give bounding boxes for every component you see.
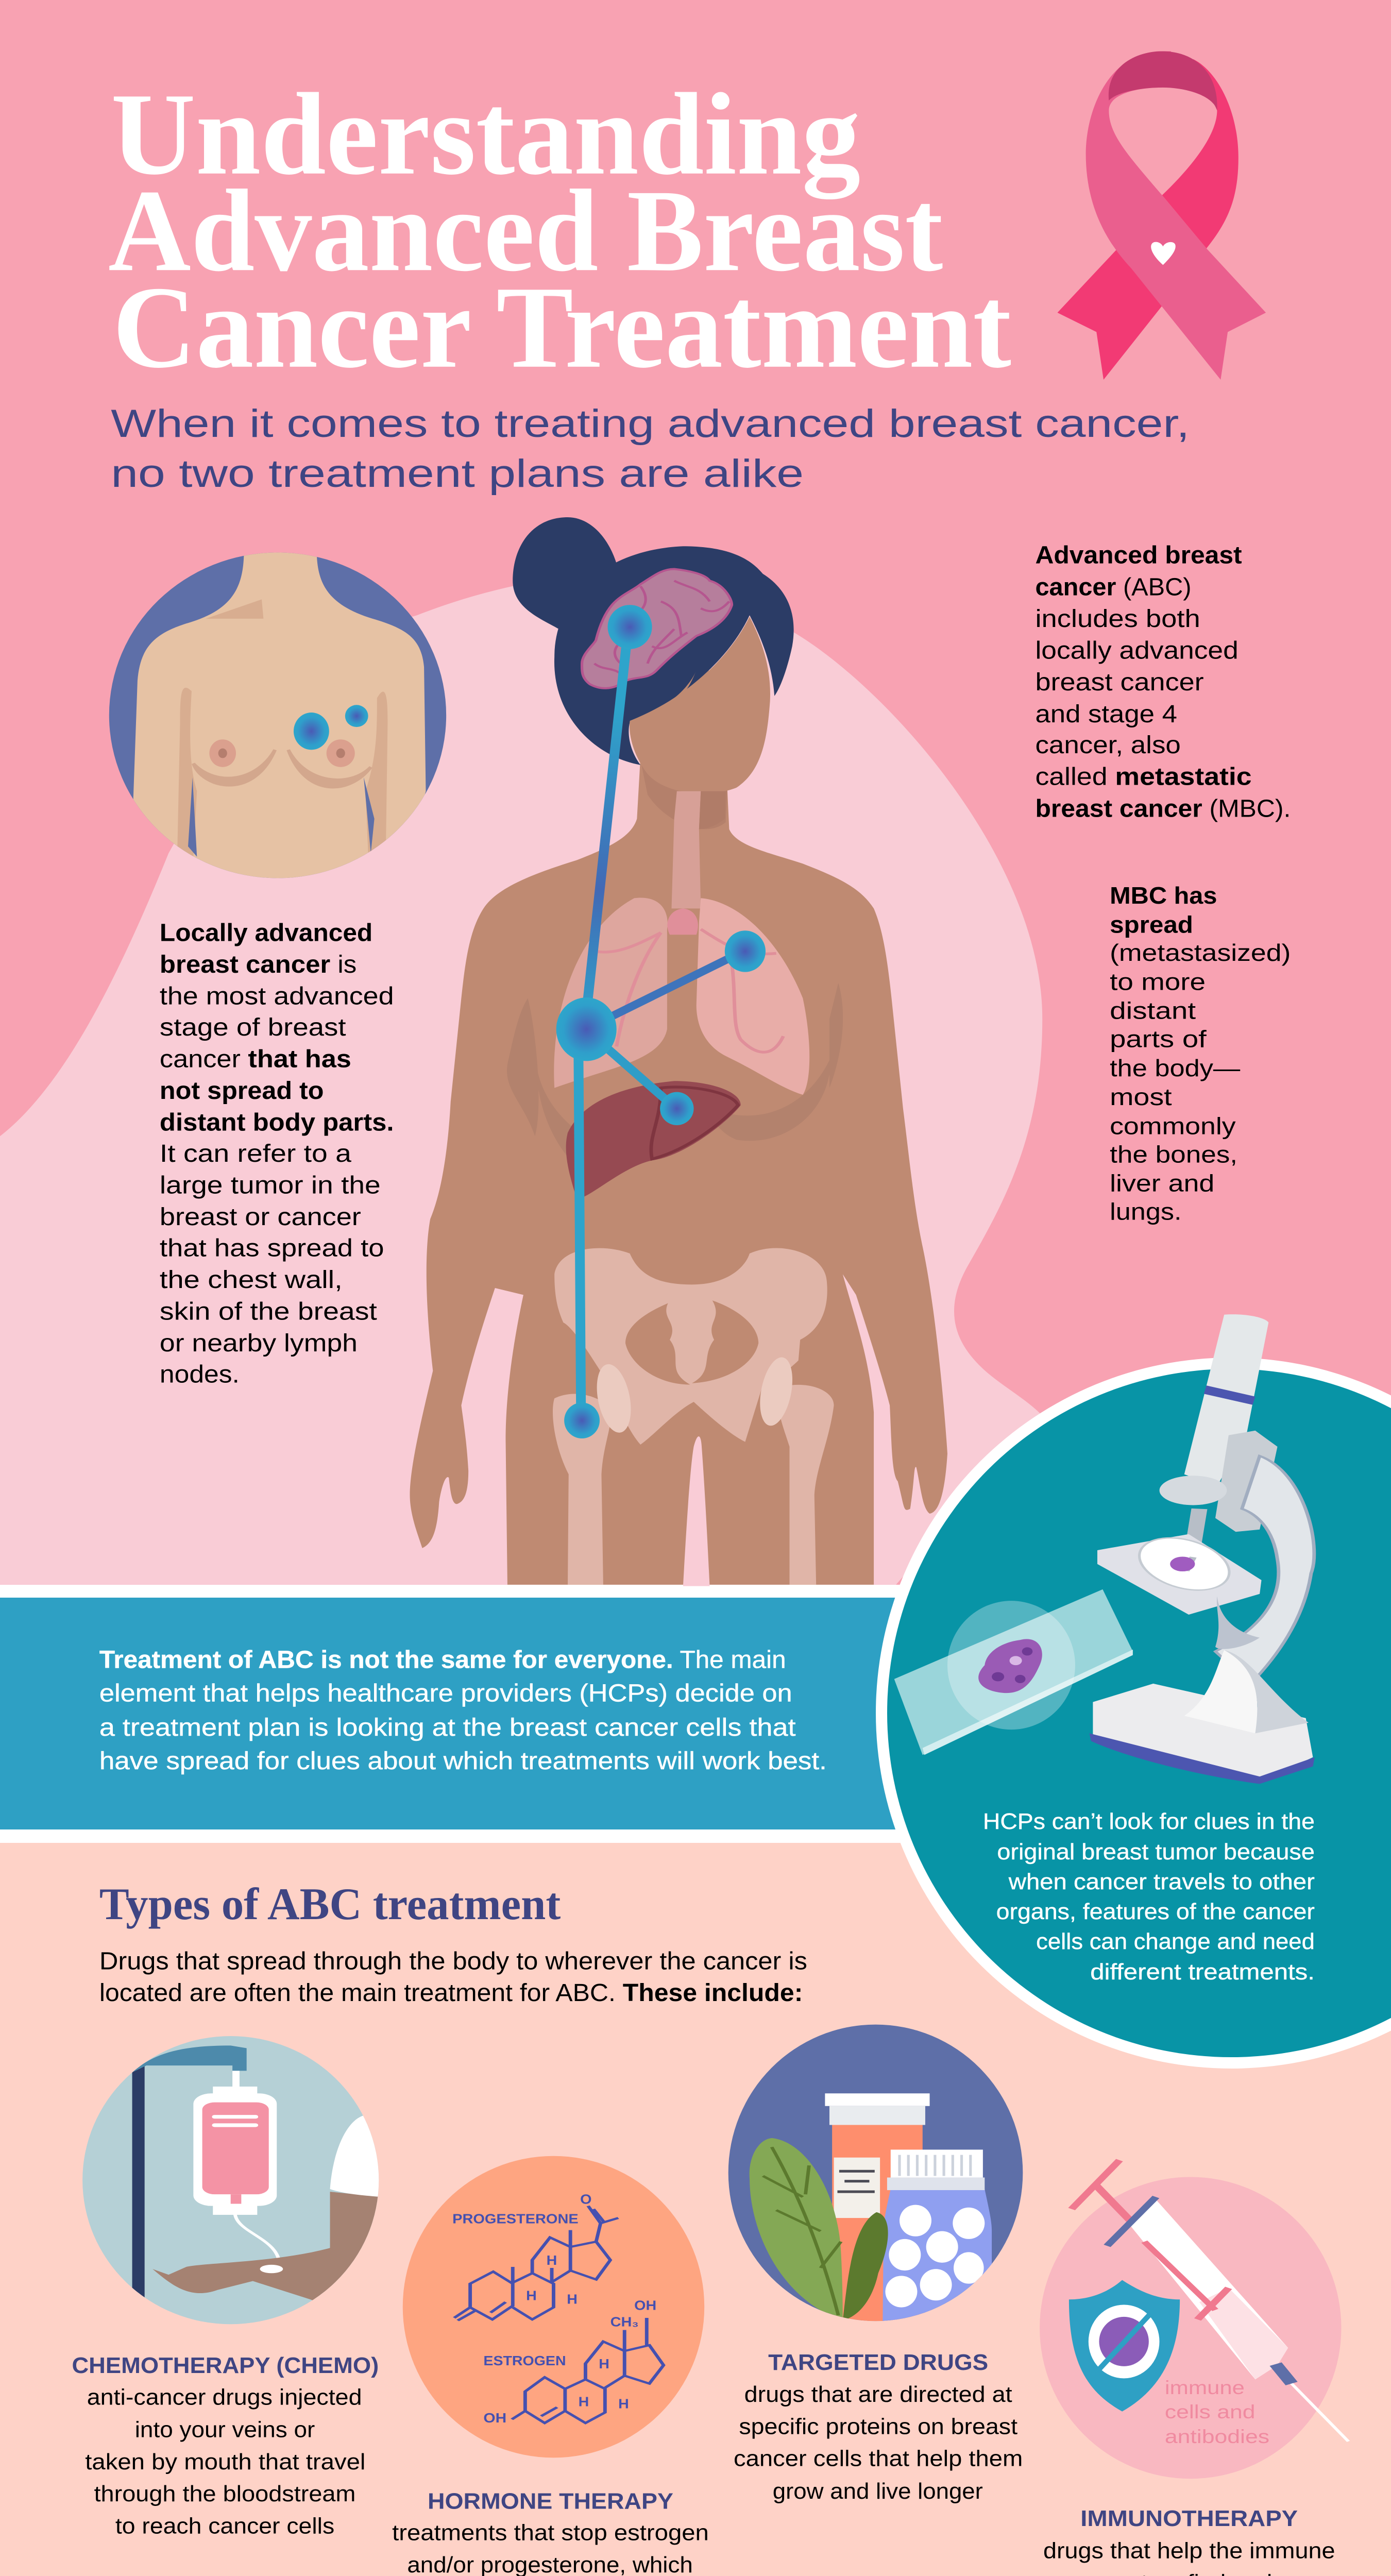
label: immune cells and antibodies: cells and xyxy=(1165,2401,1255,2422)
text: targeted drugs description xyxy=(734,2382,1023,2503)
text: locally advanced breast cancer: Locally advanced xyxy=(160,919,372,946)
icon: molecules: H xyxy=(618,2397,629,2411)
icon: molecules: ESTROGEN xyxy=(483,2353,566,2368)
icon: molecules: H xyxy=(526,2289,537,2303)
text: MBC has spread: (metastasized) xyxy=(1110,940,1291,967)
text: advanced breast cancer definition: cancer (ABC) xyxy=(1035,573,1192,601)
icon: molecules: H xyxy=(547,2253,557,2268)
leg gap xyxy=(683,1436,710,1586)
text: HCP clues xyxy=(983,1809,1315,1985)
body xyxy=(410,619,947,1585)
metastasis lines and tumors xyxy=(556,605,766,1438)
text: treatment of ABC: Treatment of ABC is not the same for everyone. The main xyxy=(99,1646,786,1673)
text: MBC has spread: liver and xyxy=(1110,1171,1214,1197)
background blob xyxy=(0,574,1042,1585)
title xyxy=(108,69,1012,392)
hair bun xyxy=(513,517,621,629)
card: immunotherapy xyxy=(1040,2160,1348,2576)
section: white gap xyxy=(0,1585,1391,1598)
text: MBC has spread: the body— xyxy=(1110,1055,1241,1081)
text: locally advanced breast cancer: the chest wall, xyxy=(160,1266,343,1293)
text: MBC has spread: most xyxy=(1110,1084,1172,1111)
heading: chemotherapy: CHEMOTHERAPY (CHEMO) xyxy=(72,2352,379,2378)
text: locally advanced breast cancer: breast or cancer xyxy=(160,1203,361,1231)
text: locally advanced breast cancer: skin of the breast xyxy=(160,1297,377,1325)
text: chemotherapy description: through the bloodstream xyxy=(94,2481,355,2506)
section: peach treatment types background xyxy=(0,1843,1391,2576)
label: immune cells and antibodies: antibodies xyxy=(1165,2426,1269,2447)
neck shadow xyxy=(640,760,727,829)
text: treatment of ABC: have spread for clues about which treatments will work best. xyxy=(99,1747,827,1774)
face xyxy=(630,617,770,793)
icon: IV drip xyxy=(82,2036,381,2328)
icon: molecules: H xyxy=(579,2395,589,2409)
text: locally advanced breast cancer: or nearby lymph xyxy=(160,1329,358,1357)
card: targeted drugs xyxy=(728,2025,1023,2503)
text: treatment of ABC xyxy=(99,1646,827,1774)
text: MBC has spread: commonly xyxy=(1110,1113,1236,1140)
card: hormone therapy xyxy=(375,2156,726,2576)
bronchi xyxy=(667,908,698,935)
text: advanced breast cancer definition: includes both xyxy=(1035,605,1200,632)
text: locally advanced breast cancer: stage of breast xyxy=(160,1013,346,1041)
text: chemotherapy description: to reach cancer cells xyxy=(115,2513,334,2538)
icon: microscope xyxy=(894,1314,1315,1784)
icon: molecules: H xyxy=(599,2357,609,2371)
text: chemotherapy description: into your veins or xyxy=(135,2417,315,2442)
panel: teal microscope circle xyxy=(876,1358,1391,2069)
text: MBC has spread: spread xyxy=(1110,911,1193,938)
icon: molecules: PROGESTERONE xyxy=(452,2212,579,2226)
text: advanced breast cancer definition: breast cancer xyxy=(1035,668,1204,696)
text: advanced breast cancer definition: cancer, also xyxy=(1035,731,1181,758)
title block xyxy=(108,51,1266,496)
subtitle xyxy=(111,401,1190,496)
text: MBC has spread xyxy=(1110,883,1291,1225)
text: targeted drugs description: cancer cells that help them xyxy=(734,2446,1023,2471)
text: locally advanced breast cancer: breast cancer is xyxy=(160,951,357,978)
subtitle: no two treatment plans are alike xyxy=(111,451,804,496)
icon: pill bottles and leaves xyxy=(728,2025,1023,2326)
text: types intro: Drugs that spread through the body to wherever the cancer is xyxy=(99,1947,807,1975)
treatment types xyxy=(72,2025,1348,2576)
text: chemotherapy description xyxy=(85,2384,365,2538)
section: blue treatment band xyxy=(0,1598,1391,1829)
glass slide xyxy=(894,1589,1133,1755)
text: MBC has spread: to more xyxy=(1110,969,1206,995)
text: locally advanced breast cancer: not spread to xyxy=(160,1077,324,1104)
text: locally advanced breast cancer: It can refer to a xyxy=(160,1140,351,1167)
text: MBC has spread: distant xyxy=(1110,998,1196,1024)
icon: molecules: O xyxy=(580,2192,592,2207)
text: locally advanced breast cancer: large tumor in the xyxy=(160,1171,381,1199)
text: advanced breast cancer definition xyxy=(1035,541,1291,822)
text: locally advanced breast cancer: cancer that has xyxy=(160,1045,351,1073)
heading: hormone therapy: HORMONE THERAPY xyxy=(428,2488,673,2514)
text: types intro: located are often the main treatment for ABC. These include: xyxy=(99,1978,803,2006)
brain xyxy=(582,569,732,688)
text: locally advanced breast cancer: that has spread to xyxy=(160,1234,384,1262)
text: targeted drugs description: specific proteins on breast xyxy=(739,2414,1017,2439)
icon: molecules xyxy=(403,2156,704,2458)
heading: targeted drugs: TARGETED DRUGS xyxy=(768,2349,988,2375)
label: immune cells and antibodies xyxy=(1165,2377,1269,2447)
trachea xyxy=(671,791,701,908)
icon: pink ribbon xyxy=(1058,51,1266,380)
hair strand xyxy=(667,670,697,707)
icon: molecules: OH xyxy=(634,2298,656,2313)
text: hormone therapy description xyxy=(375,2520,726,2576)
text: locally advanced breast cancer: the most advanced xyxy=(160,982,394,1010)
card: chemotherapy xyxy=(72,2036,381,2538)
text: MBC has spread: parts of xyxy=(1110,1026,1207,1053)
text: advanced breast cancer definition: called metastatic xyxy=(1035,762,1252,790)
femurs xyxy=(553,1394,610,1585)
text: MBC has spread: lungs. xyxy=(1110,1199,1182,1225)
text: advanced breast cancer definition: and stage 4 xyxy=(1035,700,1177,727)
heading: types of ABC treatment: Types of ABC treatment xyxy=(99,1879,561,1929)
text: targeted drugs description: grow and live longer xyxy=(773,2478,983,2503)
text: treatment of ABC: element that helps healthcare providers (HCPs) decide on xyxy=(99,1679,792,1707)
background: top pink section xyxy=(0,0,1391,1585)
text: hormone therapy description: treatments that stop estrogen xyxy=(392,2520,709,2545)
liver xyxy=(566,1081,741,1198)
icon: molecules: CH₃ xyxy=(610,2315,639,2329)
blue band and microscope xyxy=(99,1314,1315,2006)
label: immune cells and antibodies: immune xyxy=(1165,2377,1245,2398)
lungs xyxy=(554,897,668,1088)
text: advanced breast cancer definition: locally advanced xyxy=(1035,636,1239,664)
text: MBC has spread: the bones, xyxy=(1110,1141,1237,1168)
text: locally advanced breast cancer: distant body parts. xyxy=(160,1108,394,1136)
pelvis xyxy=(554,1248,827,1445)
icon: molecules: OH xyxy=(483,2411,506,2426)
text: MBC has spread: MBC has xyxy=(1110,883,1217,909)
text: locally advanced breast cancer xyxy=(160,919,394,1388)
icon: chest with breast tumors xyxy=(109,550,446,888)
figure: woman silhouette with organs xyxy=(410,517,947,1586)
text: chemotherapy description: taken by mouth that travel xyxy=(85,2449,365,2474)
text: targeted drugs description: drugs that are directed at xyxy=(744,2382,1012,2407)
text: immunotherapy description xyxy=(1043,2538,1335,2576)
icon: syringe and shield xyxy=(1040,2160,1348,2479)
text: advanced breast cancer definition: Advanced breast xyxy=(1035,541,1242,569)
icon: molecules: H xyxy=(567,2292,578,2307)
section: white gap xyxy=(0,1829,1391,1843)
arm shading xyxy=(507,998,538,1136)
anatomy section xyxy=(0,517,1291,1586)
text: treatment of ABC: a treatment plan is looking at the breast cancer cells that xyxy=(99,1713,796,1741)
text: chemotherapy description: anti-cancer drugs injected xyxy=(87,2384,362,2410)
text: advanced breast cancer definition: breast cancer (MBC). xyxy=(1035,794,1291,822)
text: types intro xyxy=(99,1947,807,2006)
hair xyxy=(554,546,794,765)
text: locally advanced breast cancer: nodes. xyxy=(160,1360,240,1388)
